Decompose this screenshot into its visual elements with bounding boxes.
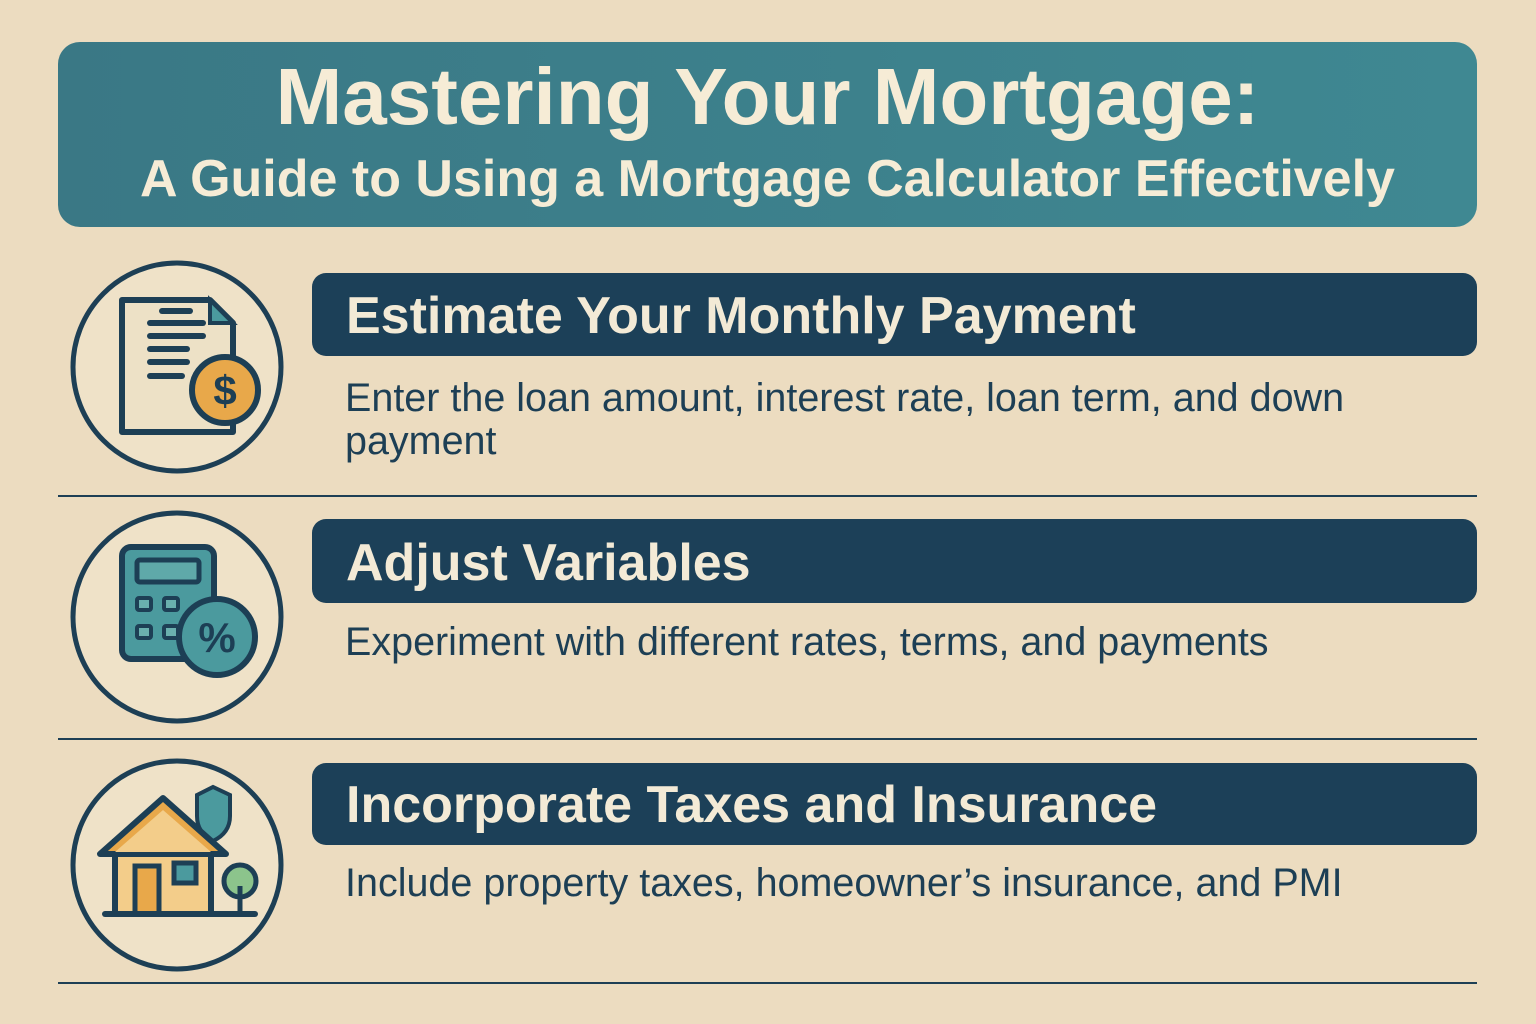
icon: calculator with percent bbox=[70, 510, 284, 724]
title banner: Mastering Your Mortgage: bbox=[276, 52, 1259, 141]
icon: house with shield and tree bbox=[70, 758, 284, 972]
title banner bbox=[58, 42, 1477, 227]
header 1 bbox=[312, 273, 1477, 356]
header 3: Incorporate Taxes and Insurance bbox=[346, 776, 1157, 834]
icon: document with dollar: $ bbox=[213, 367, 237, 414]
header 3 bbox=[312, 763, 1477, 845]
header 1: Estimate Your Monthly Payment bbox=[346, 287, 1136, 345]
header 2: Adjust Variables bbox=[346, 534, 751, 592]
text 3: Include property taxes, homeowner’s insurance, and PMI bbox=[345, 861, 1343, 905]
header 2 bbox=[312, 519, 1477, 603]
title banner: A Guide to Using a Mortgage Calculator Effectively bbox=[140, 150, 1395, 208]
text 1: Enter the loan amount, interest rate, loan term, and down payment bbox=[345, 376, 1344, 463]
icon: calculator with percent: % bbox=[198, 614, 236, 661]
icon: document with dollar bbox=[70, 260, 284, 474]
text 2: Experiment with different rates, terms, and payments bbox=[345, 620, 1269, 664]
